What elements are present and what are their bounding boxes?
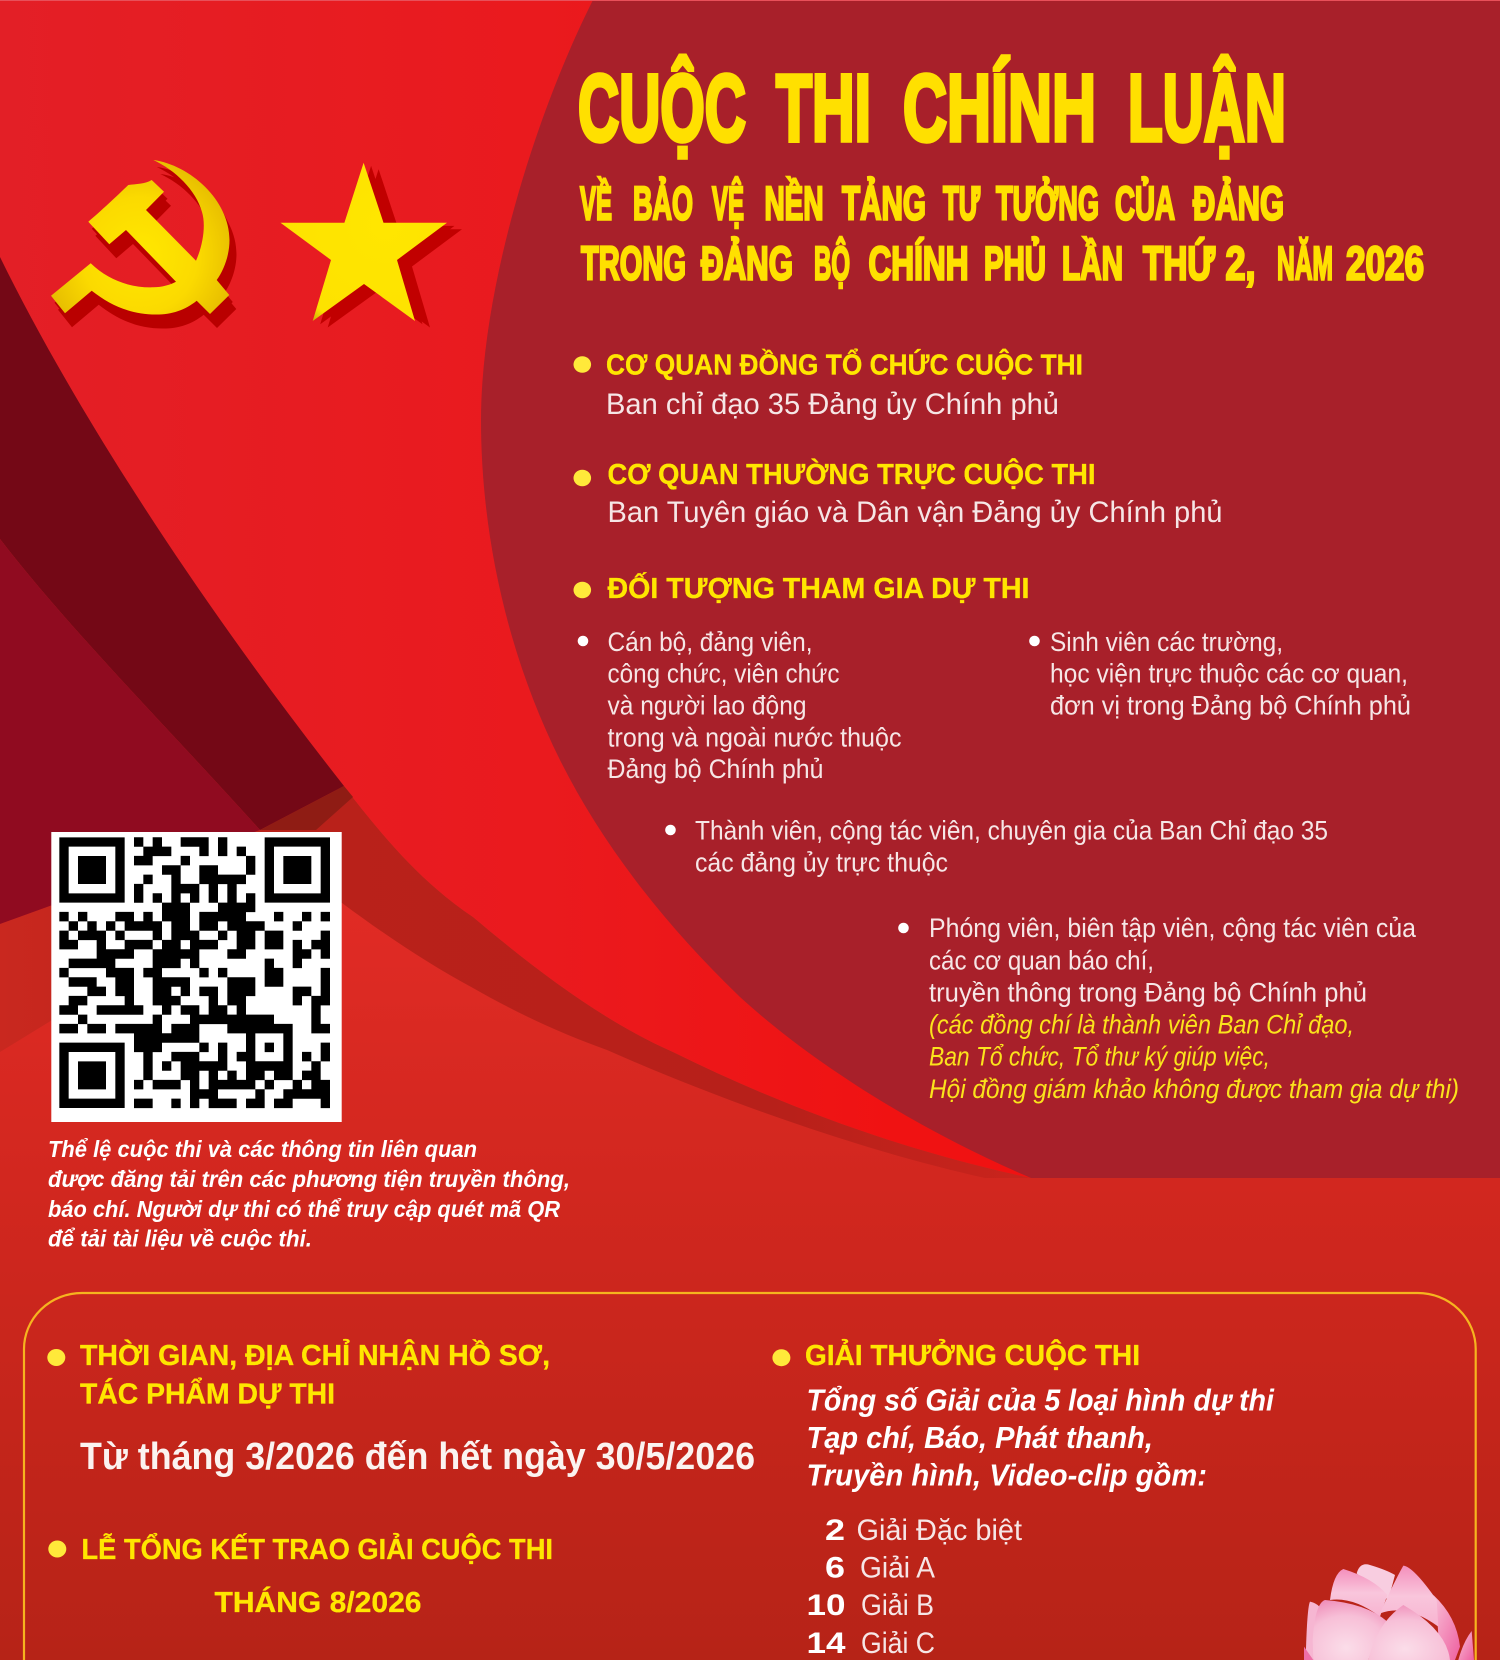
- title: LUẬN: [1128, 56, 1286, 162]
- section: submission time: TÁC PHẨM DỰ THI: [80, 1376, 335, 1410]
- title: THI: [776, 56, 871, 162]
- title: TẢNG: [842, 177, 926, 230]
- title: 2026: [1346, 237, 1424, 290]
- title: THỨ: [1143, 237, 1215, 290]
- section: prizes: Truyền hình, Video-clip gồm:: [806, 1459, 1207, 1493]
- title: ĐẢNG: [1193, 177, 1284, 230]
- QR caption: [48, 1136, 570, 1252]
- participants: officials: công chức, viên chức: [608, 658, 840, 688]
- participants: journalists: các cơ quan báo chí,: [929, 946, 1154, 976]
- section: prizes: Giải C: [861, 1627, 935, 1660]
- participants: officials: [578, 627, 902, 784]
- title: CHÍNH: [868, 237, 968, 290]
- section: prizes: Tổng số Giải của 5 loại hình dự thi: [806, 1384, 1274, 1418]
- participants: officials: và người lao động: [608, 690, 806, 720]
- title: CỦA: [1115, 177, 1175, 230]
- participants: students: đơn vị trong Đảng bộ Chính phủ: [1050, 690, 1411, 720]
- participants: students: [1029, 627, 1411, 720]
- section: submission time: THỜI GIAN, ĐỊA CHỈ NHẬN HỒ SƠ,: [80, 1338, 550, 1372]
- title: PHỦ: [984, 237, 1046, 290]
- participants: journalists: Ban Tổ chức, Tổ thư ký giúp việc,: [929, 1042, 1270, 1072]
- section: participants heading: ĐỐI TƯỢNG THAM GIA DỰ THI: [608, 571, 1030, 605]
- icon: yellow star: [280, 163, 462, 328]
- section: award ceremony: THÁNG 8/2026: [214, 1585, 422, 1619]
- participants: journalists: truyền thông trong Đảng bộ Chính phủ: [929, 978, 1367, 1008]
- participants: journalists: [898, 913, 1459, 1104]
- participants: steering committee members: Thành viên, cộng tác viên, chuyên gia của Ban Chỉ đạo 35: [695, 816, 1328, 846]
- QR caption: Thể lệ cuộc thi và các thông tin liên quan: [48, 1136, 477, 1162]
- title: VỆ: [712, 177, 744, 230]
- title: TRONG: [581, 237, 686, 290]
- participants: steering committee members: [665, 816, 1328, 878]
- section: submission time: Từ tháng 3/2026 đến hết ngày 30/5/2026: [80, 1436, 755, 1478]
- title: LẦN: [1062, 237, 1123, 290]
- section: prizes: [772, 1338, 1274, 1660]
- title: ĐẢNG: [701, 237, 793, 290]
- section: organizing body: [574, 348, 1083, 421]
- participants: journalists: Phóng viên, biên tập viên, cộng tác viên của: [929, 913, 1416, 943]
- title: NỀN: [764, 177, 824, 230]
- section: prizes: GIẢI THƯỞNG CUỘC THI: [805, 1338, 1140, 1372]
- title: 2,: [1226, 237, 1256, 290]
- section: standing body: Ban Tuyên giáo và Dân vận Đảng ủy Chính phủ: [608, 496, 1222, 529]
- section: prizes: 6: [825, 1552, 845, 1585]
- section: prizes: Giải Đặc biệt: [856, 1514, 1023, 1547]
- QR caption: báo chí. Người dự thi có thể truy cập quét mã QR: [48, 1196, 560, 1222]
- section: standing body: CƠ QUAN THƯỜNG TRỰC CUỘC THI: [608, 457, 1096, 491]
- title: VỀ: [580, 177, 612, 230]
- title: [578, 56, 1424, 290]
- icon: lotus flower: [1304, 1564, 1474, 1660]
- participants: officials: trong và ngoài nước thuộc: [608, 722, 902, 752]
- section: prizes: Giải B: [861, 1589, 934, 1622]
- title: BẢO: [633, 177, 693, 230]
- section: prizes: 10: [806, 1589, 846, 1622]
- section: prizes: 14: [806, 1627, 846, 1660]
- title: BỘ: [814, 237, 850, 290]
- title: TƯ: [943, 177, 980, 230]
- section: standing body: [574, 457, 1222, 529]
- section: organizing body: CƠ QUAN ĐỒNG TỔ CHỨC CUỘC THI: [606, 348, 1083, 382]
- participants: steering committee members: các đảng ủy trực thuộc: [695, 848, 948, 878]
- section: prizes: Tạp chí, Báo, Phát thanh,: [806, 1421, 1153, 1455]
- participants: students: học viện trực thuộc các cơ quan,: [1050, 658, 1408, 688]
- participants: journalists: Hội đồng giám khảo không được tham gia dự thi): [929, 1074, 1459, 1104]
- QR code: [51, 832, 342, 1122]
- QR caption: để tải tài liệu về cuộc thi.: [48, 1226, 312, 1252]
- title: NĂM: [1277, 237, 1333, 290]
- title: TƯỞNG: [996, 177, 1099, 230]
- section: submission time: [47, 1338, 755, 1478]
- section: prizes: 2: [825, 1514, 845, 1547]
- title: CUỘC: [578, 56, 746, 162]
- participants: officials: Đảng bộ Chính phủ: [608, 754, 824, 784]
- section: award ceremony: LỄ TỔNG KẾT TRAO GIẢI CUỘC THI: [82, 1532, 553, 1566]
- section: prizes: Giải A: [860, 1552, 935, 1585]
- rounded frame panel: [24, 1293, 1476, 1660]
- icon: hammer and sickle: [51, 160, 236, 328]
- section: organizing body: Ban chỉ đạo 35 Đảng ủy Chính phủ: [606, 388, 1059, 421]
- QR caption: được đăng tải trên các phương tiện truyền thông,: [48, 1166, 570, 1192]
- participants: journalists: (các đồng chí là thành viên Ban Chỉ đạo,: [929, 1010, 1354, 1040]
- title: CHÍNH: [903, 56, 1096, 162]
- participants: students: Sinh viên các trường,: [1050, 627, 1283, 657]
- participants: officials: Cán bộ, đảng viên,: [608, 627, 812, 657]
- section: award ceremony: [48, 1532, 553, 1619]
